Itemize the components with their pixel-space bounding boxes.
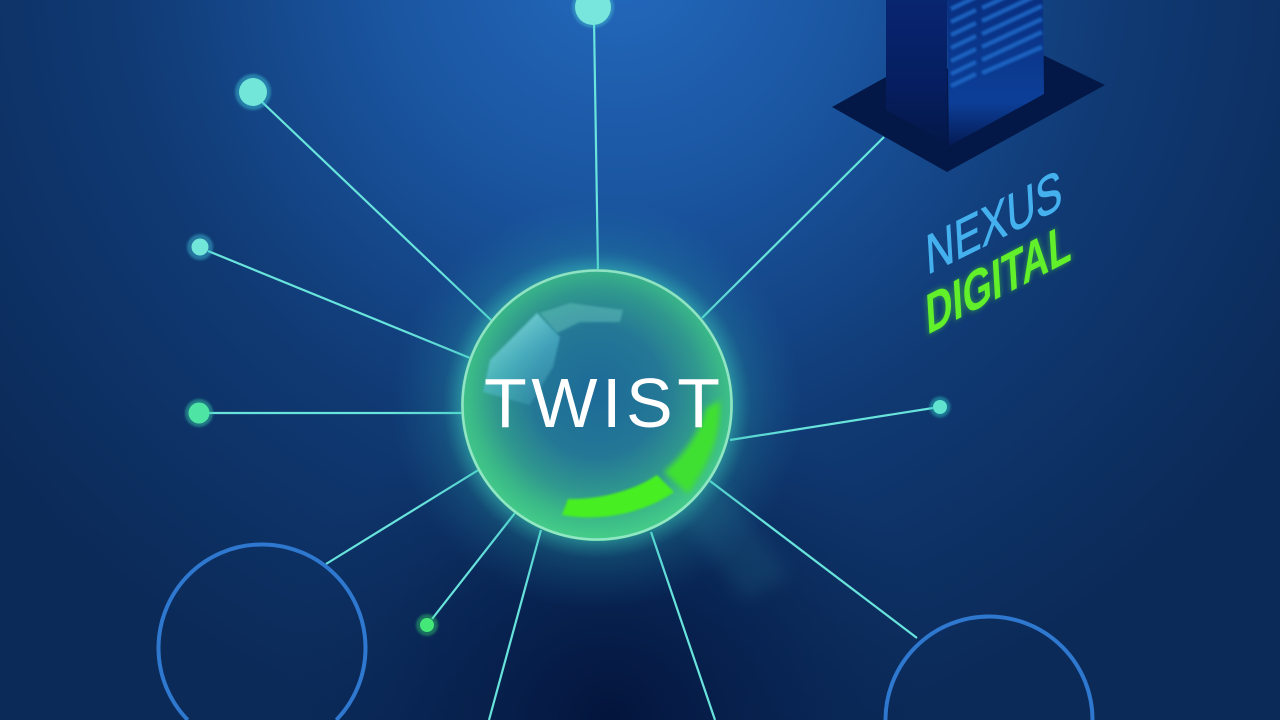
building windows <box>951 0 1042 86</box>
node: right <box>930 396 950 418</box>
sphere highlight: right green glow <box>664 400 720 494</box>
node: upper left <box>235 74 271 110</box>
node: left upper <box>187 234 213 260</box>
sphere highlight: top <box>540 303 623 333</box>
sphere: Twist <box>461 269 733 541</box>
building: isometric tower <box>832 0 1105 172</box>
building left face <box>886 0 947 143</box>
node: top <box>572 0 614 28</box>
node: left middle <box>185 399 213 427</box>
logo word: NEXUS: NEXUS <box>924 158 1064 287</box>
sphere label: TWIST <box>484 364 720 442</box>
sphere glow <box>392 200 802 610</box>
sphere rim <box>462 270 732 540</box>
building right face <box>947 0 1044 146</box>
building base <box>832 55 1105 172</box>
ring: lower right <box>886 616 1092 720</box>
sphere highlight: lower green arc <box>562 475 674 517</box>
node: lower left small <box>416 614 438 636</box>
logo: Nexus Digital <box>924 158 1073 347</box>
sphere body <box>461 269 733 541</box>
sphere highlight: upper left <box>483 313 560 405</box>
logo word: DIGITAL glow: DIGITAL <box>924 209 1073 347</box>
node dots <box>185 0 950 636</box>
logo word: DIGITAL: DIGITAL <box>924 209 1073 347</box>
ring: lower left <box>158 544 365 720</box>
connector lines <box>208 20 933 720</box>
light wedge behind sphere <box>680 488 790 600</box>
